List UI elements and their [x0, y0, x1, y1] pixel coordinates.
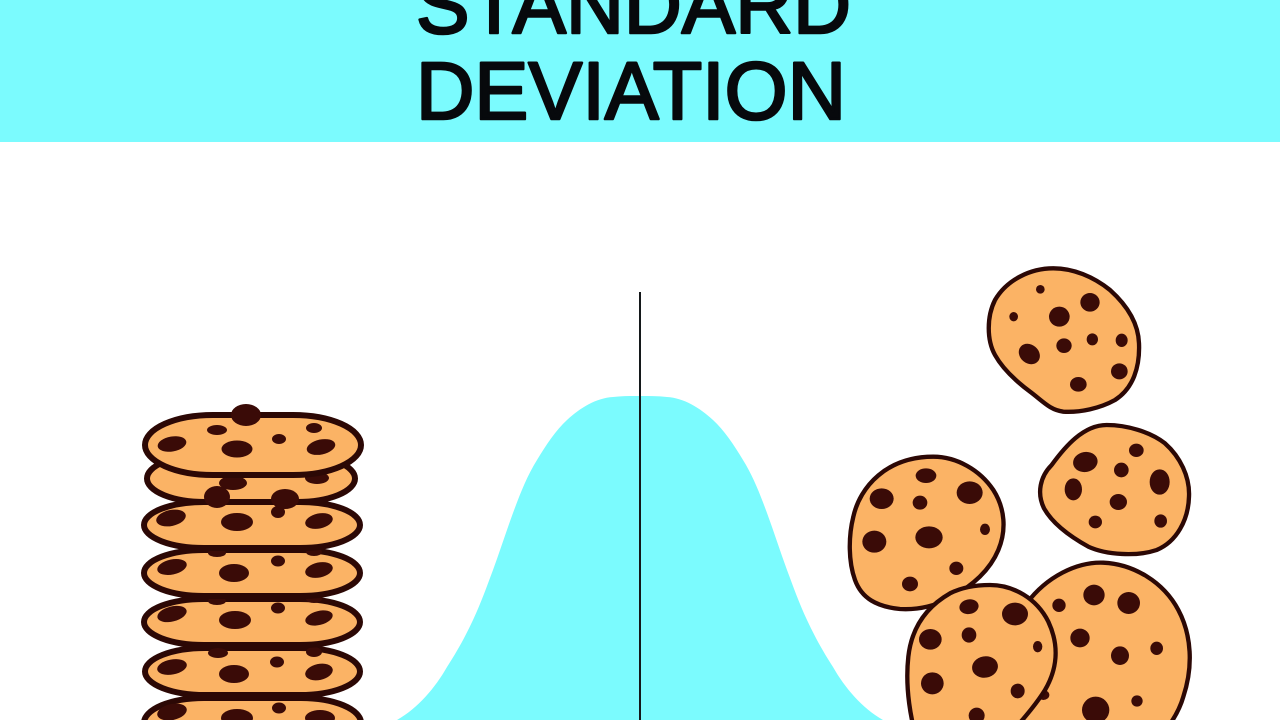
mean line — [639, 292, 641, 720]
stack cookie 5 — [144, 595, 360, 645]
stack cookie 6 — [145, 647, 360, 695]
stack cookie 1 (top) — [145, 404, 361, 475]
header band — [0, 0, 1280, 142]
scattered cookie bottom front — [907, 585, 1056, 720]
title — [416, 0, 851, 137]
scattered cookie top — [989, 268, 1139, 412]
stack cookie 3 — [144, 502, 360, 548]
stack cookie 4 — [144, 548, 360, 596]
stack cookie 2 — [147, 455, 355, 509]
scattered cookies: high standard deviation — [850, 268, 1190, 720]
scattered cookie right — [1040, 425, 1189, 554]
title: DEVIATION — [416, 46, 846, 137]
scattered cookie left — [850, 457, 1004, 609]
stack cookie 7 — [144, 698, 361, 720]
bell curve — [397, 396, 883, 720]
scattered cookie bottom right — [1007, 563, 1190, 720]
stacked cookies: low standard deviation — [144, 404, 361, 720]
